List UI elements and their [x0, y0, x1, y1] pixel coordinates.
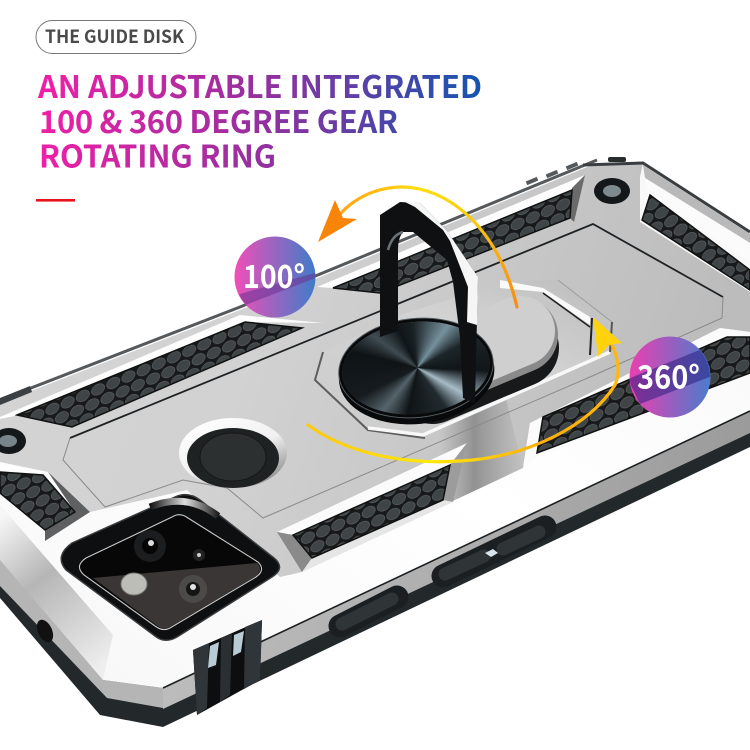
phone case shell	[0, 160, 750, 727]
right bevel of bottom strip	[443, 443, 467, 502]
camera highlight arc	[150, 501, 218, 516]
bottom grip clips	[193, 620, 262, 715]
white wedge of right lower strip	[523, 328, 750, 468]
lower bevel of bottom strip	[302, 500, 453, 572]
grip strip: top centre	[333, 190, 572, 293]
corner screw left	[0, 428, 26, 454]
main heading: ROTATING RING	[39, 132, 276, 176]
lens small	[193, 549, 205, 561]
red accent rule	[36, 199, 75, 202]
badge: 100 degrees: 100°	[243, 252, 305, 298]
oval ring seat	[432, 331, 520, 385]
corner screw top right	[594, 178, 630, 204]
side button long	[443, 527, 545, 576]
camera outer frame	[61, 495, 280, 640]
left bevel of bottom strip	[277, 532, 312, 572]
arch highlight	[403, 201, 478, 325]
shading streak on body	[440, 395, 523, 507]
speaker port	[34, 617, 56, 645]
camera module	[61, 495, 280, 640]
white band on upper right edge	[645, 178, 750, 262]
white accent above left strip	[0, 315, 323, 419]
volume keys top edge	[0, 157, 626, 405]
thin panel outline	[63, 297, 723, 518]
top right edge of case	[583, 163, 750, 232]
camera glass lower tint	[93, 563, 260, 629]
flash	[121, 573, 147, 595]
fingerprint ring	[179, 418, 287, 488]
badge: 360 degrees: 360°	[637, 352, 700, 398]
ring metal disc	[338, 315, 494, 421]
grooved panel line	[70, 224, 723, 438]
white accent above top strip	[317, 175, 585, 288]
bottom arrow head	[593, 317, 622, 357]
case dark base edge	[0, 405, 750, 727]
grip strip: right lower	[537, 337, 750, 453]
grip strip: bottom centre	[293, 465, 450, 558]
badge: 360 degrees	[628, 336, 712, 418]
folding ring arch	[380, 201, 478, 403]
top rotation arrow	[318, 187, 517, 307]
top arrow head	[318, 200, 357, 242]
main heading: AN ADJUSTABLE INTEGRATED	[37, 62, 482, 107]
top edge of case	[0, 160, 597, 400]
grip strip: lower left	[0, 472, 75, 530]
main silver back body	[0, 163, 750, 577]
grip strip: left middle	[17, 322, 302, 427]
octagonal ring base	[315, 280, 612, 438]
bottom rotation arrow	[308, 317, 622, 462]
case bevel lower left	[0, 505, 113, 680]
white accent above lower left strip	[0, 462, 48, 476]
tag: the guide disk: THE GUIDE DISK	[45, 23, 185, 49]
main heading: 100 & 360 DEGREE GEAR	[39, 97, 398, 142]
arch inner sheen	[388, 232, 403, 250]
grip strip: top right	[642, 195, 750, 290]
case white rim surface	[0, 160, 750, 688]
bevel right of top strip	[570, 175, 585, 222]
side dark seam	[163, 411, 750, 688]
lens main	[134, 530, 166, 562]
case left silver side	[0, 560, 163, 708]
gray band on upper right edge	[643, 165, 750, 243]
lens lower	[179, 575, 207, 603]
camera lens glass	[79, 515, 262, 630]
bevel of lower left strip	[45, 472, 90, 541]
case silver side band	[163, 411, 750, 709]
main heading	[37, 62, 482, 176]
side button small	[340, 597, 397, 626]
white accent above bottom strip	[277, 443, 467, 535]
badge: 100 degrees	[233, 236, 318, 318]
